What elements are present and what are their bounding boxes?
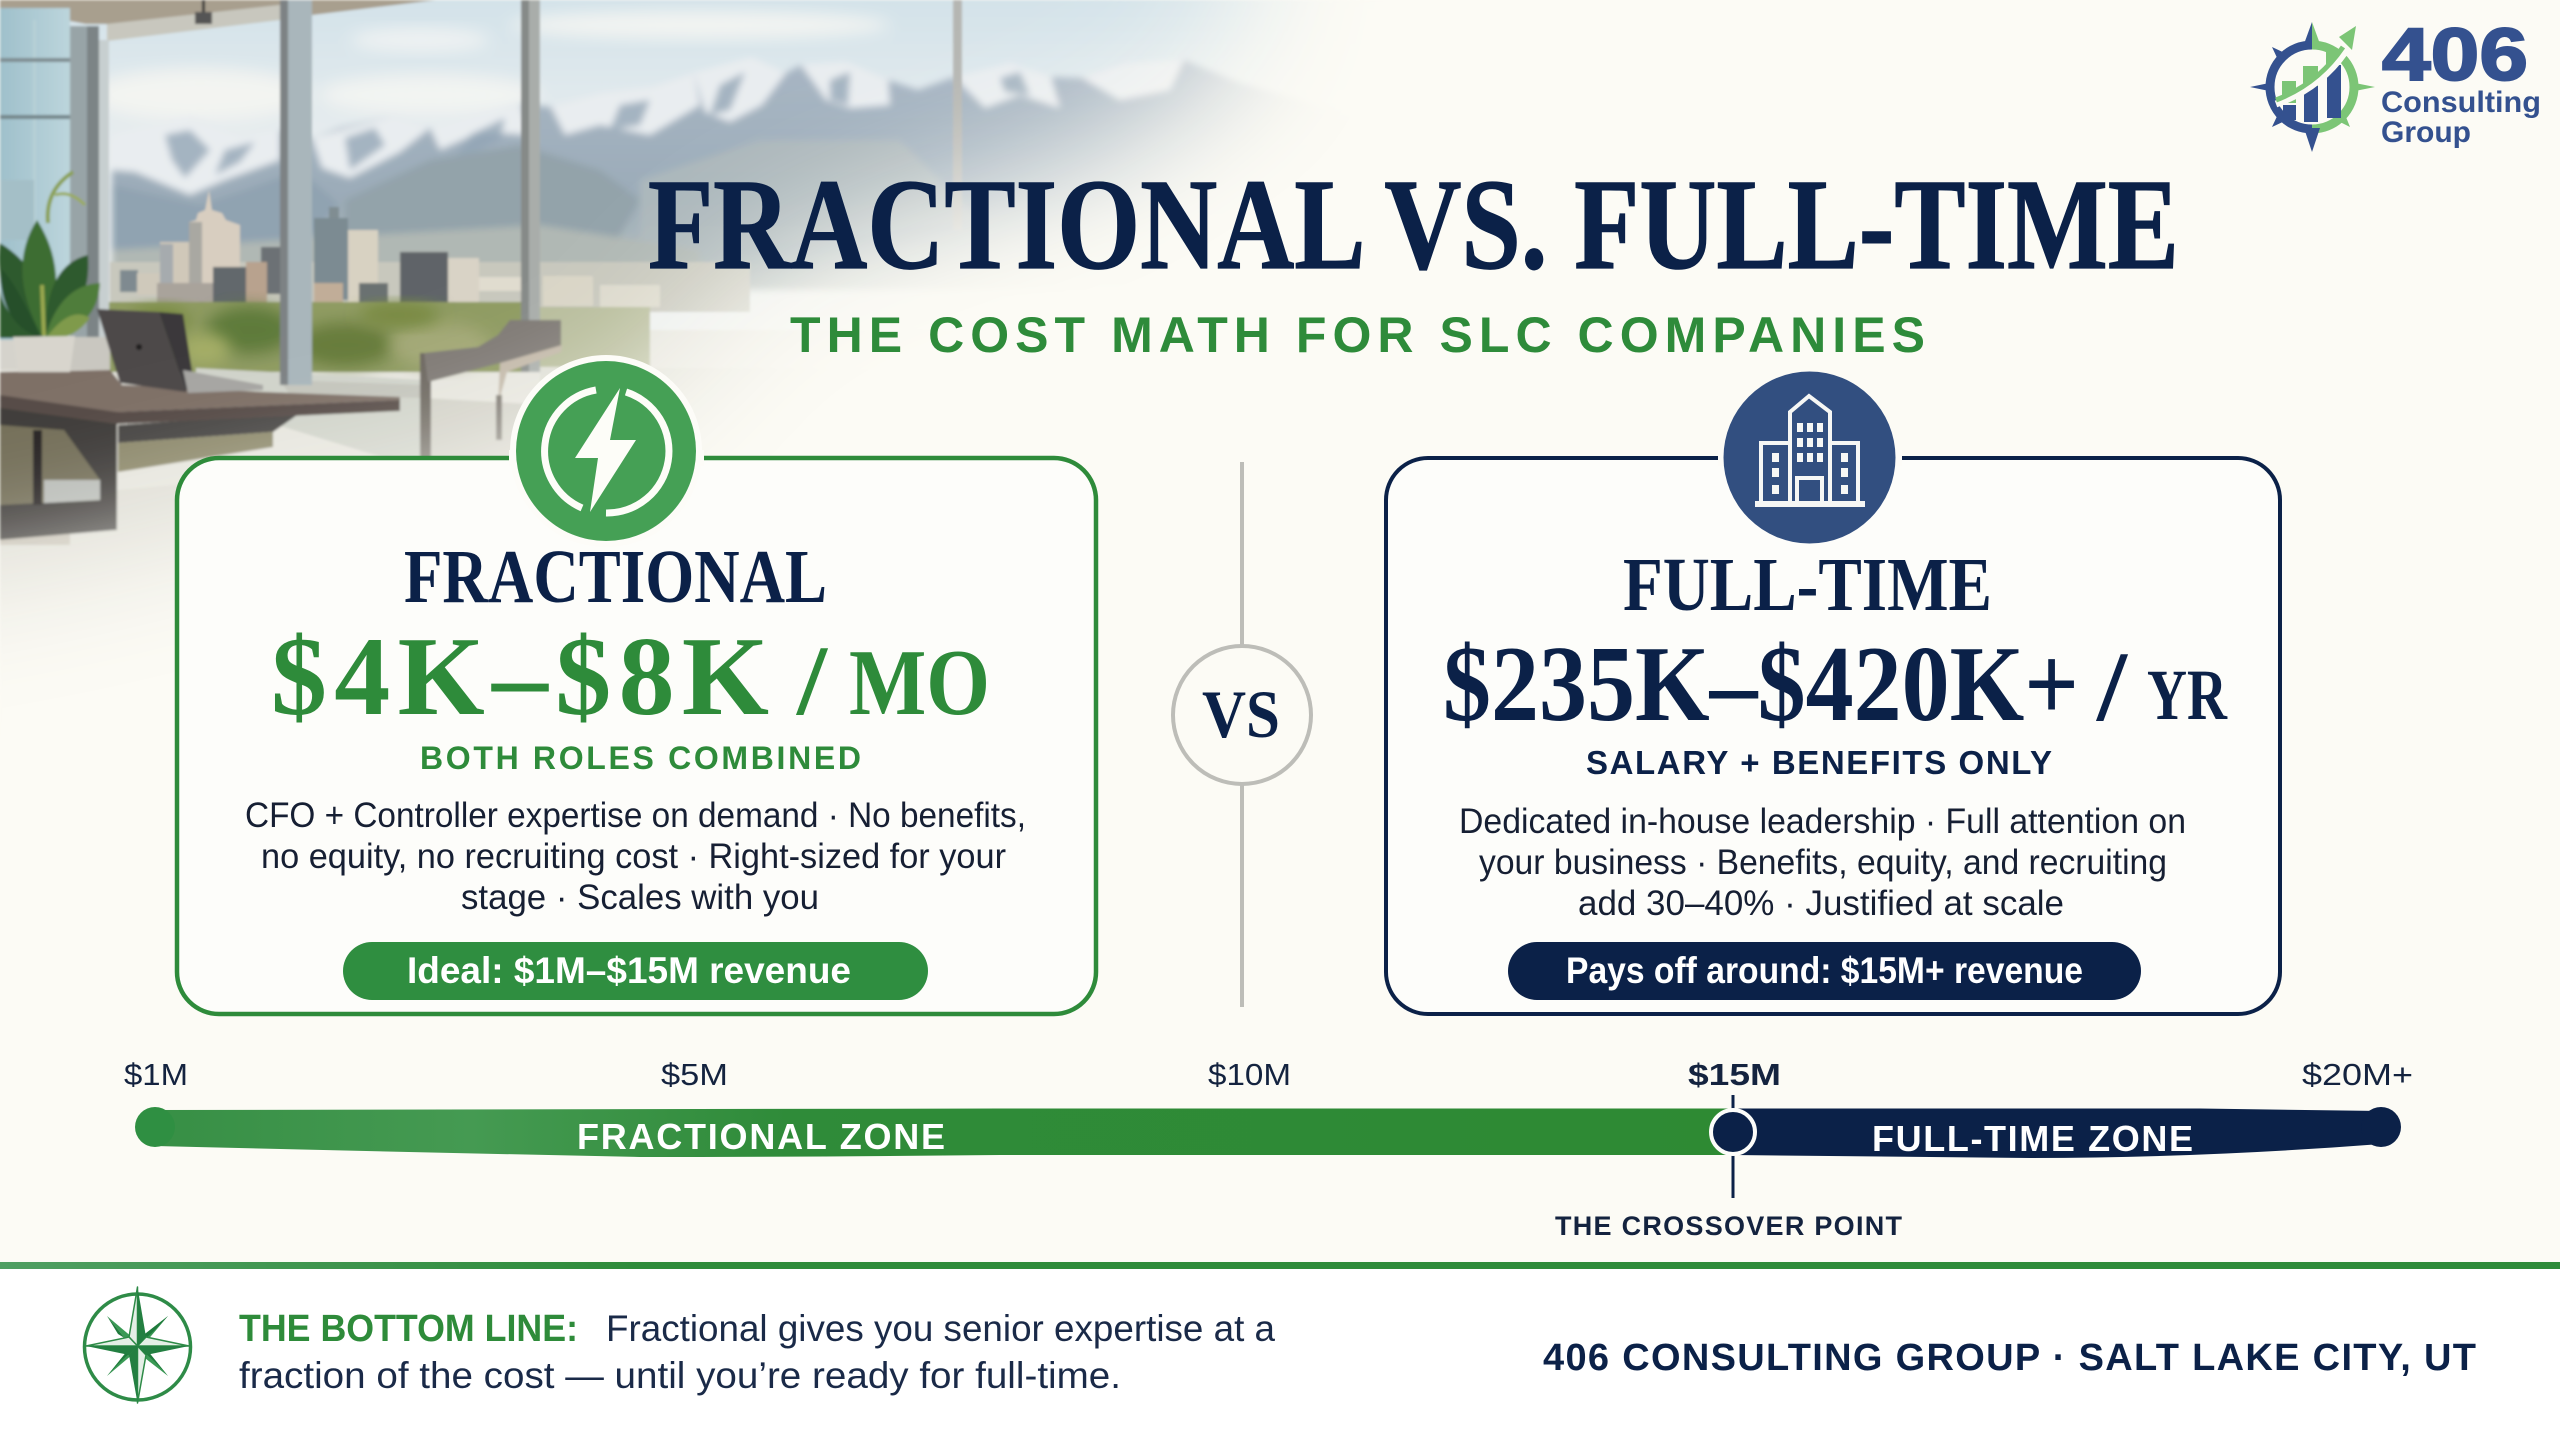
bottom line message: THE BOTTOM LINE:: [239, 1308, 578, 1350]
description: fractional: [245, 796, 1026, 917]
logo wordmark: [2381, 13, 2541, 149]
icon: compass star: [84, 1287, 190, 1403]
pill: pays off revenue: Pays off around: $15M+ revenue: [1566, 950, 2083, 991]
pill: ideal revenue: [343, 942, 928, 1000]
description: full-time: your business · Benefits, equity, and recruiting: [1479, 843, 2167, 882]
logo wordmark: Consulting: [2381, 86, 2541, 119]
full-time zone bar: [1734, 1107, 2401, 1159]
under desk: [0, 395, 117, 540]
pill: ideal revenue: Ideal: $1M–$15M revenue: [407, 950, 851, 991]
description: full-time: add 30–40% · Justified at scale: [1578, 884, 2064, 923]
description: full-time: [1459, 802, 2186, 923]
price: $4K–$8K / MO: /: [796, 625, 828, 736]
divider with VS badge: VS: [1202, 676, 1280, 752]
sublabel: both roles combined: BOTH ROLES COMBINED: [420, 740, 861, 776]
icon: office building: [1718, 372, 1902, 544]
scale labels: [124, 1057, 2413, 1092]
footer rule: [0, 1262, 2560, 1269]
bottom line message: [239, 1308, 1275, 1396]
panel: full-time: [1386, 372, 2280, 1014]
price: $4K–$8K / MO: MO: [849, 631, 990, 735]
fractional zone bar: [135, 1107, 1734, 1157]
laptop: [97, 309, 186, 392]
interior floor: [194, 366, 421, 456]
scale labels: $20M+: [2302, 1057, 2413, 1092]
subtitle: THE COST MATH FOR SLC COMPANIES: [790, 307, 1925, 363]
scale labels: $1M: [124, 1057, 188, 1092]
timeline: revenue scale: [124, 1057, 2413, 1241]
pill: pays off revenue: [1508, 942, 2141, 1000]
pots and plant: [0, 340, 18, 370]
heading: full-time: FULL-TIME: [1623, 543, 1992, 627]
price: $235K–$420K+ / YR: YR: [2147, 655, 2228, 735]
panel: fractional: [177, 355, 1096, 1014]
price: $235K–$420K+ / YR: /: [2096, 631, 2128, 742]
mountains: [108, 59, 1258, 292]
description: fractional: CFO + Controller expertise on demand · No benefits,: [245, 796, 1026, 835]
scale labels: $5M: [661, 1057, 728, 1092]
sublabel: salary + benefits only: SALARY + BENEFITS ONLY: [1586, 744, 2052, 781]
bottom band: [0, 1269, 2560, 1440]
crossover marker: [1711, 1095, 1755, 1198]
description: fractional: no equity, no recruiting cost · Right-sized for your: [261, 837, 1006, 876]
trees: [108, 302, 522, 372]
logo: 406 Consulting Group: [2250, 13, 2541, 152]
full-time zone bar: FULL-TIME ZONE: [1872, 1118, 2193, 1159]
scale labels: $10M: [1208, 1057, 1291, 1092]
heading: fractional: FRACTIONAL: [404, 535, 827, 619]
desk: [0, 370, 400, 412]
description: fractional: stage · Scales with you: [461, 878, 819, 917]
crossover label: THE CROSSOVER POINT: [1555, 1211, 1902, 1241]
chair: [420, 353, 431, 461]
divider with VS badge: [1173, 462, 1311, 1007]
footer company line: 406 CONSULTING GROUP · SALT LAKE CITY, UT: [1543, 1337, 2476, 1379]
logo wordmark: 406: [2382, 13, 2528, 96]
price: $235K–$420K+ / YR: $235K–$420K+: [1443, 625, 2079, 744]
price: $4K–$8K / MO: [271, 615, 990, 739]
hero photo: office window with mountains and city skyline: [0, 0, 1291, 620]
logo wordmark: Group: [2381, 116, 2471, 149]
price: $4K–$8K / MO: $4K–$8K: [271, 615, 769, 739]
icon: lightning bolt: [509, 355, 704, 547]
city: [110, 262, 750, 312]
description: full-time: Dedicated in-house leadership · Full attention on: [1459, 802, 2186, 841]
bottom line message: fraction of the cost — until you’re ready for full-time.: [239, 1355, 1121, 1396]
window frames: [0, 0, 436, 24]
title: FRACTIONAL VS. FULL-TIME: [648, 153, 2179, 297]
bottom line message: Fractional gives you senior expertise at a: [606, 1308, 1275, 1349]
logo compass mark: [2250, 22, 2375, 152]
fractional zone bar: FRACTIONAL ZONE: [577, 1116, 945, 1157]
scale labels: $15M: [1688, 1057, 1781, 1092]
